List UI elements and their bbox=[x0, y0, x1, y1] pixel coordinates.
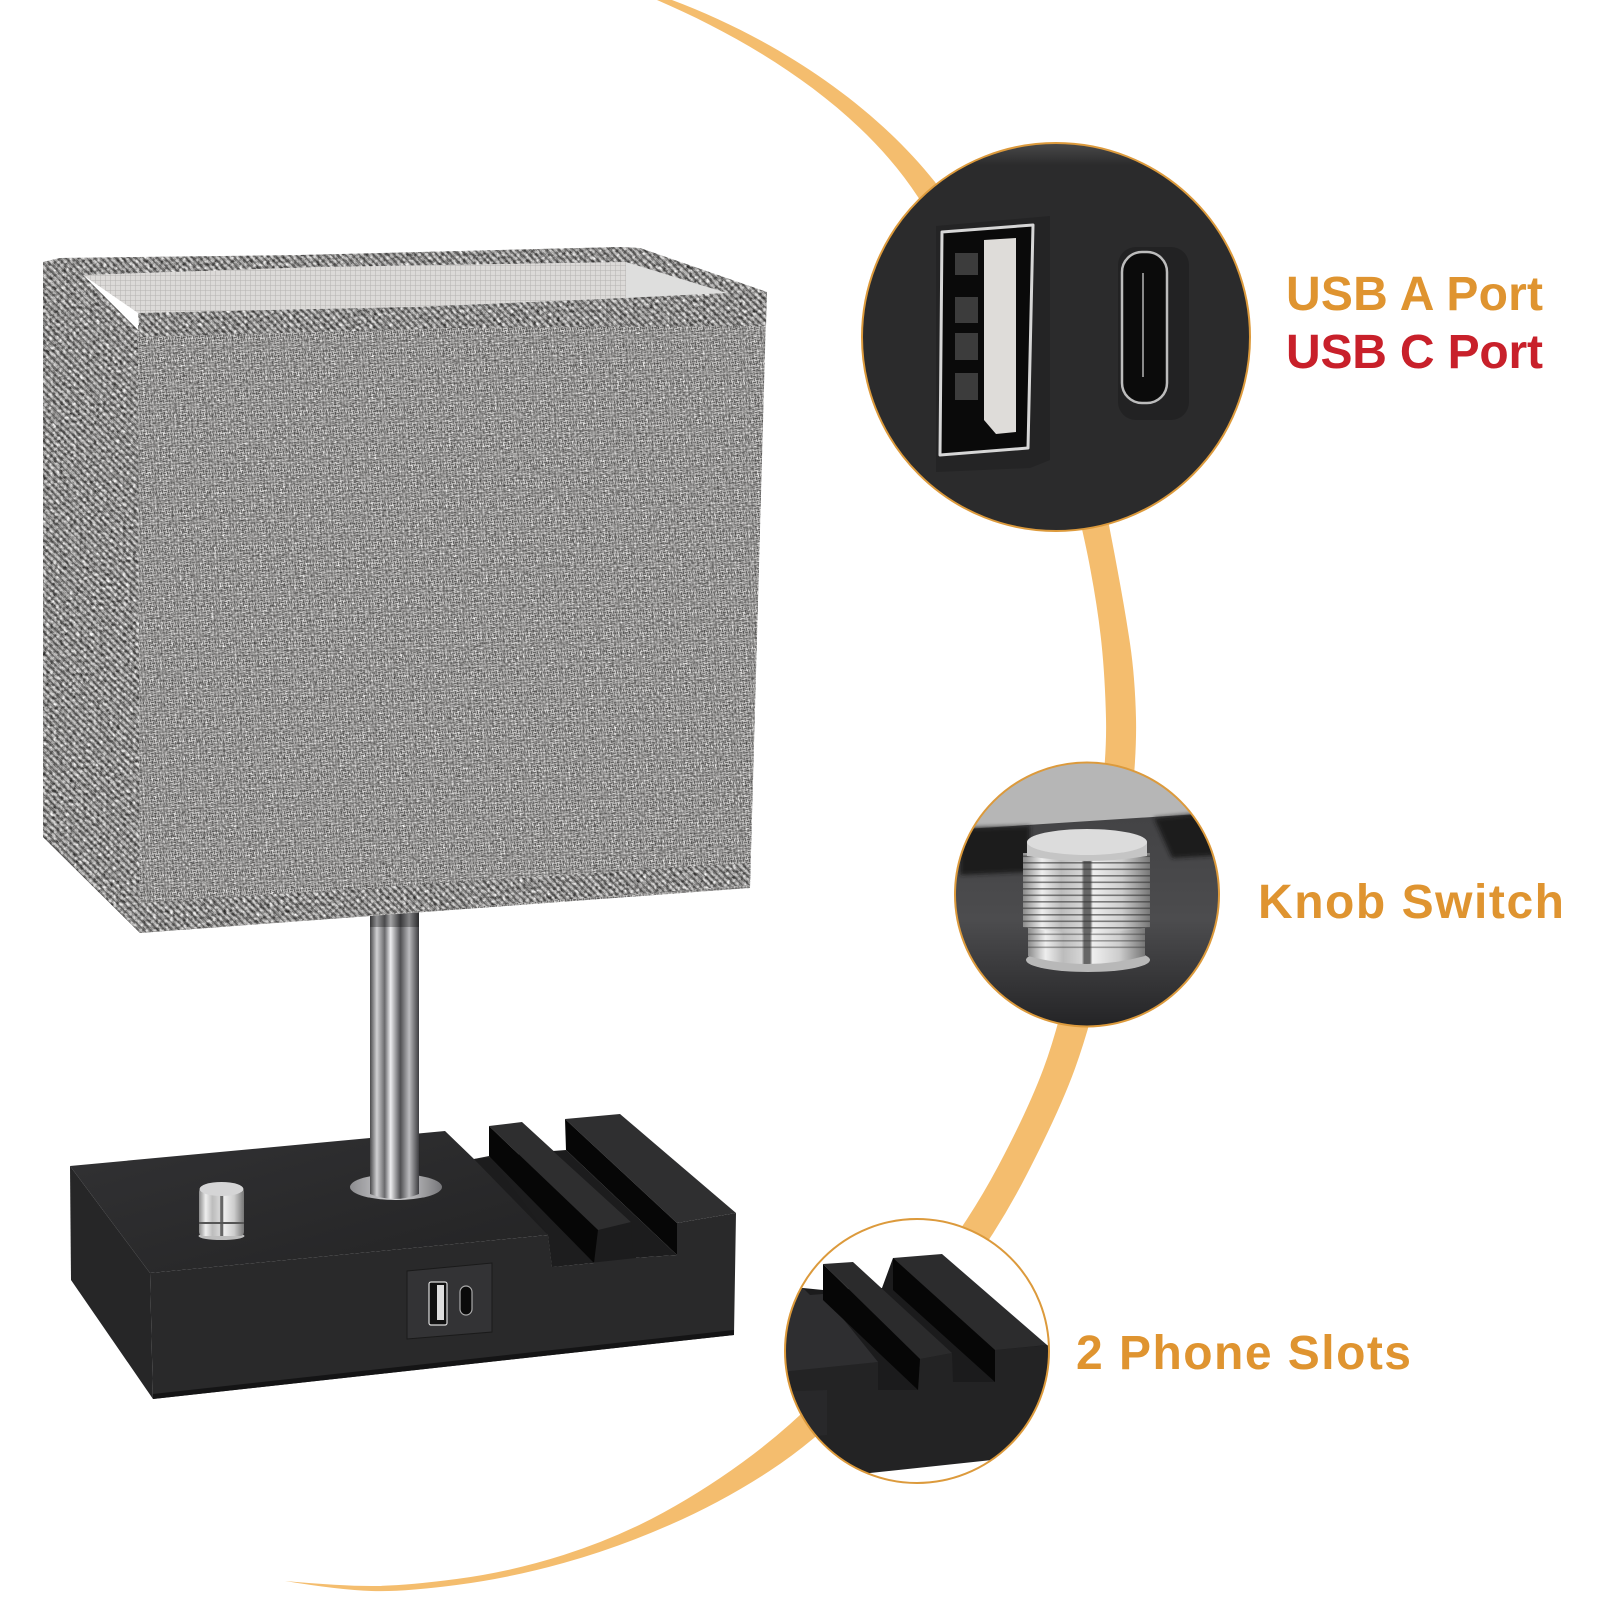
callout circle: knob switch bbox=[950, 750, 1230, 1026]
base front bbox=[150, 1213, 736, 1399]
lamp shade bbox=[43, 247, 767, 933]
shade front panel bbox=[138, 315, 766, 933]
base top bbox=[70, 1131, 548, 1273]
side port plate bbox=[775, 1390, 827, 1440]
base block front bbox=[817, 1345, 1048, 1473]
small knob on base bbox=[198, 1182, 244, 1240]
base block top surface bbox=[780, 1288, 878, 1372]
shade side panel bbox=[43, 262, 140, 933]
lamp stem bbox=[350, 905, 442, 1200]
label: 2 Phone Slots: 2 Phone Slots bbox=[1076, 1327, 1411, 1380]
shade top rim bbox=[43, 247, 767, 337]
base USB port plate bbox=[407, 1263, 492, 1339]
backing bbox=[802, 1258, 1047, 1390]
label: USB A Port: USB A Port bbox=[1286, 268, 1543, 321]
label: Knob Switch: Knob Switch bbox=[1258, 876, 1564, 929]
callout circle: USB ports bbox=[860, 143, 1260, 531]
phone slots bbox=[474, 1114, 736, 1267]
callout circle: phone slots bbox=[775, 1219, 1050, 1483]
shade bottom trim bbox=[140, 863, 750, 933]
USB C port bbox=[1118, 247, 1189, 420]
label: USB C Port: USB C Port bbox=[1286, 326, 1543, 379]
base left side bbox=[70, 1166, 153, 1399]
second rail bbox=[893, 1254, 1047, 1382]
large chrome knob bbox=[1023, 829, 1150, 972]
lamp product photo bbox=[43, 247, 767, 1399]
curved orange arc connecting the callouts bbox=[285, 0, 1136, 1591]
shade opening bbox=[83, 262, 727, 313]
lamp base bbox=[70, 1114, 736, 1399]
first rail bbox=[823, 1262, 952, 1390]
USB A port bbox=[938, 224, 1034, 456]
